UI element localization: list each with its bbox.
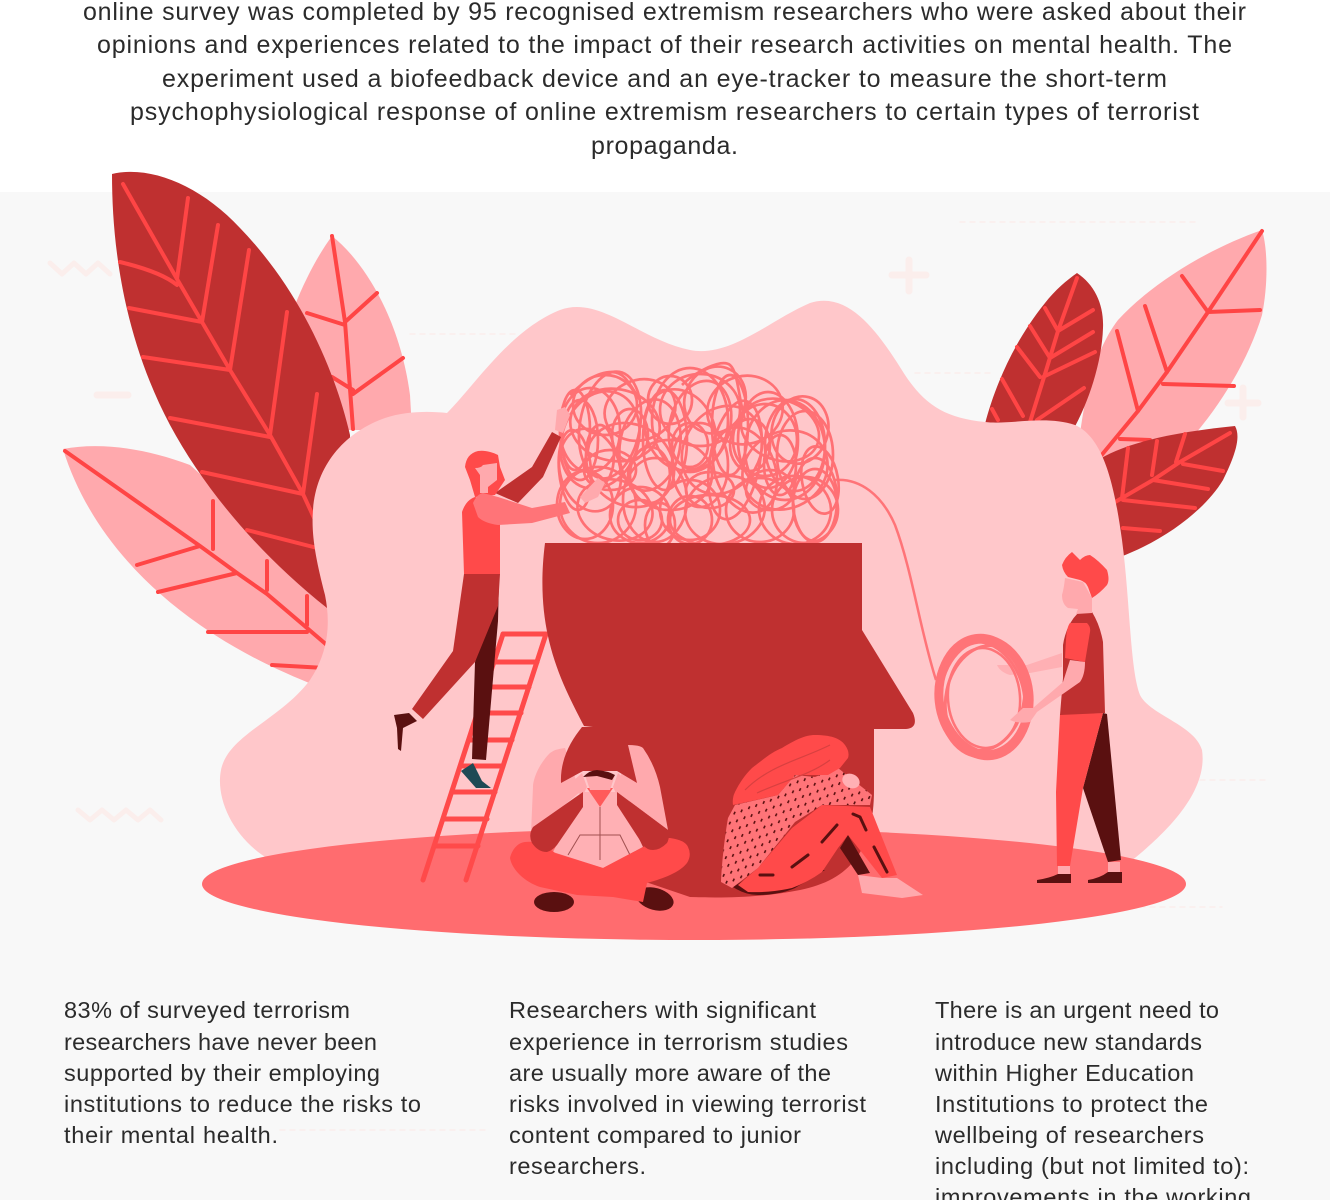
girl feet (858, 875, 923, 898)
text column: experience finding: risks involved in viewing terrorist (509, 1091, 866, 1117)
man head and neck (1062, 578, 1092, 614)
text column: 83% finding: 83% of surveyed terrorism (64, 997, 350, 1023)
girl trousers (738, 805, 897, 892)
woman trousers (472, 581, 499, 760)
text column: standards recommendation: Institutions to protect the (935, 1091, 1208, 1117)
girl sweater (721, 768, 872, 888)
leaf: left large dark (112, 172, 352, 620)
man shoes (1037, 872, 1122, 883)
woman hair (465, 451, 505, 497)
woman raised arm (495, 432, 561, 503)
faint background decorations (50, 222, 1265, 1130)
figure: woman on ladder (394, 407, 605, 788)
text column: 83% finding: their mental health. (64, 1122, 278, 1148)
text column: standards recommendation: introduce new standards (935, 1029, 1202, 1055)
text column: standards recommendation: wellbeing of researchers (934, 1122, 1204, 1148)
intro paragraph: psychophysiological response of online extremism researchers to certain types of terrorist (130, 98, 1199, 126)
boy face and hands (585, 775, 615, 790)
leaf: right dark top (985, 273, 1103, 432)
intro paragraph (83, 0, 1246, 160)
text column: standards recommendation: There is an urgent need to (935, 997, 1219, 1023)
text column: 83% finding: institutions to reduce the risks to (64, 1091, 421, 1117)
man front arm (1010, 660, 1085, 723)
boy dark hood (561, 727, 637, 783)
woman top (462, 497, 500, 574)
man shirt (1060, 612, 1105, 715)
head silhouette (542, 543, 915, 897)
pink background blob (220, 301, 1203, 862)
boy pale hood (531, 745, 668, 833)
tangled thread scribble (556, 362, 840, 543)
intro paragraph: experiment used a biofeedback device and an eye-tracker to measure the short-term (162, 65, 1167, 93)
text column: experience finding: experience in terrorism studies (509, 1029, 848, 1055)
thread coil (929, 629, 1039, 765)
text column: 83% finding (64, 997, 421, 1148)
man hair (1062, 552, 1108, 598)
woman face (475, 463, 497, 493)
girl trouser shadow (733, 870, 825, 895)
ground ellipse (202, 828, 1186, 940)
woman shoes (394, 713, 417, 751)
intro paragraph: opinions and experiences related to the impact of their research activities on mental health. The (97, 31, 1232, 59)
text column: standards recommendation: within Higher Education (934, 1060, 1194, 1086)
text column: experience finding: researchers. (509, 1153, 646, 1179)
man trousers (1083, 713, 1121, 862)
text column: 83% finding: researchers have never been (64, 1029, 377, 1055)
intro paragraph: propaganda. (591, 132, 738, 160)
boy legs (510, 838, 690, 902)
text column: experience finding (509, 997, 866, 1179)
woman front arm (473, 493, 570, 525)
man back arm (997, 653, 1062, 675)
leaf: left rear pale (295, 236, 412, 430)
girl hair (733, 735, 849, 805)
boy shoes (534, 892, 574, 912)
text column: standards recommendation: including (but not limited to): (935, 1153, 1249, 1179)
leaf: right pale (1080, 230, 1266, 460)
figure: seated girl (721, 735, 923, 898)
boy torso (553, 792, 643, 868)
girl trouser stitches (760, 814, 887, 875)
text column: 83% finding: supported by their employing (64, 1060, 380, 1086)
leaf: left lower pale (63, 446, 340, 695)
tangled thread wire (835, 480, 936, 680)
text column: experience finding: Researchers with significant (509, 997, 816, 1023)
figure: man holding coil (929, 552, 1122, 883)
figure: seated boy (510, 727, 690, 915)
leaf: right dark lower (1095, 426, 1237, 557)
girl hand (840, 771, 862, 791)
ladder (423, 634, 546, 880)
text column: experience finding: are usually more aware of the (509, 1060, 831, 1086)
man socks (1058, 862, 1120, 874)
text column: standards recommendation (934, 997, 1251, 1200)
text column: experience finding: content compared to junior (509, 1122, 801, 1148)
boy arms (530, 792, 669, 852)
